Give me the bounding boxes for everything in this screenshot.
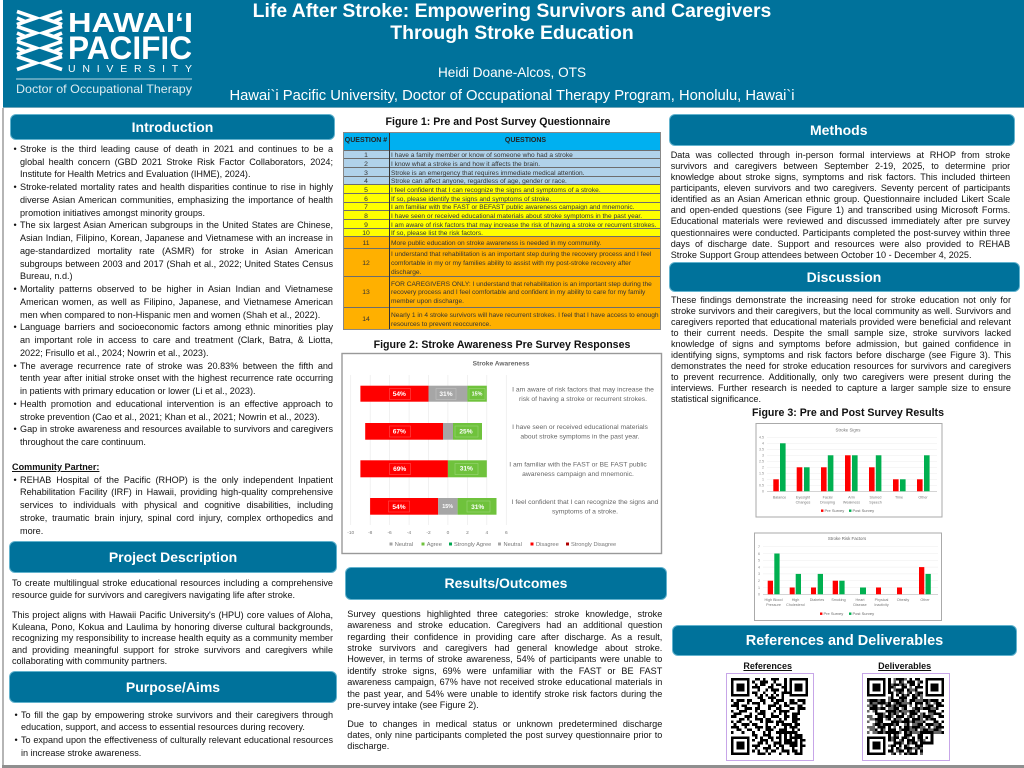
table: survey questionnaire: I know what a stroke is and how it affects the brain. (391, 161, 540, 168)
table: survey questionnaire: 6 (364, 196, 368, 202)
pre survey bars (773, 455, 923, 491)
table: survey questionnaire: I am familiar with the FAST or BEFAST public awareness campaign and mnemonic. (391, 204, 634, 211)
chart: stroke signs: 2 (762, 466, 764, 470)
text block: Project Description goal: resource guide for survivors and caregivers navigating life after stroke. (12, 590, 295, 600)
bar: FAST campaign: 69% (393, 466, 406, 473)
text block: Introduction bullets: tenth year after initial stroke onset with the highest recurrence rate occurring (20, 373, 333, 383)
text block: Introduction bullets: Asian Indian, Filipino, Korean, Japanese and Vietnamese with an increase in (20, 233, 333, 243)
chart: stroke signs: 0.5 (759, 484, 764, 488)
table header: QUESTIONS (505, 137, 546, 144)
panel: Results/Outcomes heading: Results/Outcomes (445, 575, 567, 591)
table: survey questionnaire: I understand that rehabilitation is an important step during the recovery process and I feel (391, 251, 651, 258)
legend: Strongly Disagree (571, 542, 616, 548)
table: survey questionnaire: comfortable in my or my families ability to assist with my post-stroke recovery after (391, 260, 631, 267)
panel: Results/Outcomes heading (345, 567, 667, 600)
QR code: References (726, 673, 814, 761)
chart: stroke signs: Speech (869, 500, 882, 504)
heading: Figure 2: Figure 2: Stroke Awareness Pre Survey Responses (374, 339, 630, 351)
text block: Methods: Educational materials were reviewed and discussed immediately after pre survey (671, 216, 1010, 226)
text block: Purpose/Aims bullets: To expand upon the effectiveness of culturally relevant educational resources (21, 735, 333, 745)
chart: stroke signs: Eyesight (796, 496, 810, 500)
text block: Community Partner: Rehabilitation Facility (IRF) in Hawaii, providing high-quality comprehensive (20, 487, 333, 497)
text block: Project Description goal (12, 578, 333, 600)
chart: stroke signs: 4.5 (759, 436, 764, 440)
text block: Results summary: Survey questions highlighted three categories: stroke knowledge, stroke (347, 609, 662, 619)
table: survey questionnaire: 9 (364, 222, 368, 228)
chart: stroke risk factors: 4 (758, 565, 760, 569)
text block: Results summary: identify stroke signs, 69% were unfamiliar with the FAST or BE FAST (347, 666, 662, 676)
chart: stroke signs: 2.5 (759, 460, 764, 464)
table: survey questionnaire: I have a family member or know of someone who had a stroke (391, 152, 573, 159)
text block: Introduction bullets: promotion initiatives amongst minority groups. (20, 208, 205, 218)
panel: Purpose/Aims heading: Purpose/Aims (126, 679, 220, 695)
chart: stroke risk factors: 3 (758, 572, 760, 576)
text block: Results summary: regarding their confidence in providing care after discharge. As a result, (347, 632, 662, 642)
label: References: References (743, 661, 792, 671)
title (253, 0, 771, 44)
text block: Methods: survivors and caregivers between September 2-19, 2025, to determine prior (671, 161, 1010, 171)
chart: stroke signs: Other (918, 496, 928, 500)
QR code: Deliverables (862, 673, 950, 761)
text block: Results summary (347, 609, 662, 710)
chart: stroke risk factors: 5 (758, 559, 760, 563)
bar: FAST campaign (360, 460, 487, 477)
statement labels (509, 387, 659, 515)
chart: stroke signs: Changes (796, 500, 811, 504)
bar: FAST campaign: 31% (460, 466, 473, 473)
text block: Results discharge note: discharge. (347, 741, 389, 751)
author: Heidi Doane-Alcos, OTS (438, 65, 586, 80)
text block: Purpose/Aims bullets: To fill the gap by empowering stroke survivors and their caregivers through (21, 710, 333, 720)
text block: Project Description goal: To create multilingual stroke educational resources including a comprehensive (12, 578, 333, 588)
chart: stroke signs: Weakness (843, 500, 860, 504)
text block: Methods: and open-ended questions (see Figure 1) and transcribed using Microsoft Forms. (671, 205, 1010, 215)
table: survey questionnaire: I have seen or received educational materials about stroke symptoms in the past year. (391, 213, 642, 220)
text block: Methods: days of discharge date. Support and resources were also provided to REHAB (671, 239, 1010, 249)
chart: stroke risk factors: Stroke Risk Factors (828, 536, 867, 541)
table: survey questionnaire: resources to prevent reoccurence. (391, 321, 491, 328)
text block: Discussion: interviews. Further research is needed to capture a larger sample size to ensure (671, 383, 1011, 393)
legend: Pre Survey (824, 611, 843, 616)
table: survey questionnaire: member upon discharge. (391, 298, 464, 305)
text block: Methods (671, 150, 1010, 260)
panel: Introduction heading: Introduction (132, 119, 213, 135)
table: survey questionnaire: Stroke is an emergency that requires immediate medical attention. (391, 170, 585, 176)
text block: Methods: questionnaires were conducted. Participants completed the post-survey within three (671, 228, 1010, 238)
heading: Figure 1: Figure 1: Pre and Post Survey Questionnaire (386, 116, 610, 128)
text block: Project Description values (12, 610, 333, 666)
chart: stroke signs: 4 (762, 442, 764, 446)
chart: stroke risk factors: 6 (758, 552, 760, 556)
logo: Hawai'i Pacific University (16, 7, 193, 96)
header banner (3, 0, 1024, 108)
legend: Pre Survey (824, 508, 844, 513)
text block: Methods: participants, eleven survivors and two caregivers. Seventy percent of participants (671, 183, 1010, 193)
chart: stroke risk factors: Disease (853, 603, 867, 607)
text block: Discussion: statistical significance. (671, 394, 761, 404)
bar: confidence recognizing signs: 31% (471, 504, 484, 511)
chart: stroke risk factors: Pressure (766, 603, 781, 607)
x axis labels: -8 (368, 530, 373, 536)
table: survey questionnaire: 13 (362, 289, 370, 296)
chart: stroke signs: Stroke Signs (836, 428, 861, 432)
legend (390, 542, 616, 548)
panel: References and Deliverables heading (672, 625, 1017, 656)
bar: confidence recognizing signs: 15% (442, 504, 453, 510)
text block: Introduction bullets: Stroke is the third leading cause of death in 2021 and continues to be a (20, 144, 333, 154)
legend: Disagree (536, 542, 559, 548)
text block: Introduction bullets: The average recurrence rate of stroke was 20.83% between the fifth and (20, 361, 333, 371)
statement labels: I feel confident that I can recognize the signs and (512, 499, 659, 506)
table: survey questionnaire: 1 (364, 152, 368, 159)
chart: stroke signs: 3.5 (759, 448, 764, 452)
text block: Introduction bullets: Language barriers and socioeconomic factors among ethnic minorities play (20, 322, 333, 332)
chart: stroke signs: 1 (762, 478, 764, 482)
legend: Neutral (504, 542, 522, 548)
text block: Methods: Stroke Support Group attendees between October 10 - December 4, 2025. (671, 250, 971, 260)
text block: Project Description values: and providing meaningful support for stroke survivors and caregivers while (12, 645, 333, 655)
text block: Introduction bullets: American women, as well as Filipino, Japanese, and Vietnamese American (20, 297, 333, 307)
heading: Community Partner: Community Partner: (12, 462, 99, 472)
panel: Methods heading (668, 114, 1015, 146)
logo wordmark: PACIFIC (68, 30, 192, 66)
chart: stroke risk factors: High Blood (764, 598, 783, 602)
title: Life After Stroke: Empowering Survivors and Caregivers (253, 0, 771, 22)
chart: stroke risk factors: Other (920, 598, 930, 602)
text block: Methods: Data was collected through in-person formal interviews at RHOP from stroke (671, 150, 1010, 160)
statement labels: symptoms of a stroke. (552, 508, 618, 515)
panel: Discussion heading: Discussion (807, 269, 881, 285)
chart: stroke risk factors: High (792, 598, 799, 602)
text block: Project Description values: recognizing my responsibility to increase health equity as a community member (12, 633, 333, 643)
legend: Post Survey (852, 611, 874, 616)
text block: Project Description values: collaborating with community partners. (12, 656, 167, 666)
statement labels: I have seen or received educational materials (512, 424, 649, 431)
chart: stroke risk factors: Heart (855, 598, 865, 602)
chart: stroke risk factors (754, 532, 942, 621)
legend (821, 508, 874, 513)
chart: stroke signs: Time (895, 496, 903, 500)
text block: Introduction bullets: age-standardized mortality rate (ASMR) for stroke in Asian American (20, 246, 333, 256)
x axis labels: 2 (466, 530, 469, 536)
text block: Discussion: demonstrates the need for stroke education resources for survivors and caregivers (671, 361, 1011, 371)
legend: Post Survey (852, 508, 874, 513)
panel: Project Description heading (9, 541, 337, 573)
chart: stroke signs: 0 (762, 490, 764, 494)
text block: Introduction bullets: Institute for Health Metrics and Evaluation (IHME), 2024). (20, 169, 250, 179)
statement labels: I am familiar with the FAST or BE FAST public (509, 462, 647, 469)
table: survey questionnaire: If so, please identify the signs and symptoms of stroke. (391, 196, 551, 202)
bar: educational materials (365, 423, 482, 440)
table: survey questionnaire: 8 (364, 213, 368, 220)
chart: stroke signs: 1.5 (759, 472, 764, 476)
bar: risk factors: 15% (472, 392, 483, 398)
logo wordmark: HAWAI‘I (68, 7, 193, 38)
chart: stroke risk factors: Smoking (831, 598, 846, 602)
x axis labels: -2 (426, 530, 431, 536)
text block: Results summary: stroke survivors and caregivers had general knowledge about stroke. (347, 643, 662, 653)
logo wordmark: UNIVERSITY (68, 63, 192, 75)
text block: Purpose/Aims bullets: in increase stroke awareness. (21, 748, 141, 758)
table: survey questionnaire: More public education on stroke awareness is needed in my community. (391, 240, 601, 247)
chart: stroke risk factors: Obesity (897, 598, 909, 602)
table: survey questionnaire: 12 (362, 260, 370, 267)
text block: Introduction bullets: Mortality patterns observed to be higher in Asian Indian and Vietnamese (20, 284, 333, 294)
text block: Results summary: awareness and stroke education. Caregivers had an additional question (347, 620, 662, 630)
text block: Results summary: awareness campaign, 67% have not received stroke educational materials in (347, 677, 662, 687)
logo wordmark (16, 7, 193, 96)
text block: Introduction bullets: in patients with primary education or lower (Li et al., 2023). (20, 386, 256, 396)
text block: Community Partner (14, 475, 333, 536)
text block: Introduction bullets: 2022; Frisullo et al., 2024; Nowrin et al., 2023). (20, 348, 209, 358)
text block: Results discharge note: Due to changes in medical status or unknown predetermined discharge (347, 719, 662, 729)
table: survey questionnaire: 4 (364, 178, 368, 185)
logo wordmark: Doctor of Occupational Therapy (16, 83, 192, 96)
icon: chevron pattern (17, 12, 62, 70)
panel: Introduction heading (10, 114, 335, 140)
table: survey questionnaire: I feel confident that I can recognize the signs and symptoms of a stroke. (391, 187, 601, 194)
label: Deliverables: Deliverables (878, 661, 931, 671)
text block: Introduction bullets: The six largest Asian American subgroups in the United States are Chinese, (20, 220, 333, 230)
bar: risk factors: 31% (439, 391, 453, 398)
chart: stroke risk factors: 0 (758, 593, 760, 597)
post survey bars (780, 443, 930, 491)
text block: Purpose/Aims bullets: education, support, and access to essential resources during recovery. (21, 722, 305, 732)
legend: Agree (427, 542, 442, 548)
table header: QUESTION # (345, 137, 387, 144)
chart: stroke risk factors: Physical (875, 598, 889, 602)
text block: Discussion: knowledge of signs and symptoms before admission, but gained confidence in (671, 339, 1011, 349)
text block: Discussion: to prevent recurrence. Additionally, only two caregivers were present during the (671, 372, 1011, 382)
x axis labels: 4 (485, 530, 488, 536)
text block: Project Description values: This project aligns with Hawaii Pacific University's (HPU) core values of Aloha, (12, 610, 333, 620)
statement labels: about stroke symptoms in the past year. (520, 433, 640, 440)
text block: Introduction bullets: Health promotion and educational intervention is an effective approach to (20, 399, 333, 409)
chart: stroke signs: Facial (823, 496, 833, 500)
chart: stroke signs: Arm (848, 496, 855, 500)
text block: Introduction bullets: men when compared to non-Hispanic men and women (Shah et al., 2022). (20, 310, 320, 320)
text block: Results discharge note: dates, only nine participants completed the post survey questionnaire prior to (347, 730, 662, 740)
table: survey questionnaire: FOR CAREGIVERS ONLY: I understand that rehabilitation is an important step during the (391, 281, 652, 288)
text block: Introduction bullets: Bureau, n.d.) (20, 271, 73, 281)
x axis labels: -10 (347, 530, 354, 536)
chart: stroke risk factors: Inactivity (874, 603, 889, 607)
chart: stroke risk factors: 7 (758, 545, 760, 549)
text block: Purpose/Aims bullets (14, 710, 333, 758)
text block: Community Partner: REHAB Hospital of the Pacific (RHOP) is the only independent Inpatient (20, 475, 333, 485)
pre survey bars (768, 567, 924, 594)
panel: References and Deliverables heading: References and Deliverables (746, 632, 943, 648)
x axis labels: 0 (447, 530, 450, 536)
x axis labels: 6 (505, 530, 508, 536)
text block: Introduction bullets: global health concern (GBD 2021 Stroke Risk Factor Collaborators, 2024; (20, 157, 333, 167)
text block: Discussion: to their current needs. Despite the small sample size, stroke survivors lacked (671, 328, 1011, 338)
text block: Discussion: These findings demonstrate the increasing need for stroke education not only for (671, 294, 1011, 304)
text block: Introduction bullets: Stroke-related mortality rates and health disparities continue to rise in highly (20, 182, 333, 192)
text block: Methods: identified as an Asian American ethnic group. Questionnaire included Likert Scale (671, 194, 1010, 204)
table: survey questionnaire: I am aware of risk factors that may increase the risk of having a stroke or recurrent strokes. (391, 222, 656, 228)
statement labels: risk of having a stroke or recurrent strokes. (519, 396, 647, 403)
text block: Discussion: stroke survivors and their caregivers, but the local community as well. Survivors and (671, 306, 1011, 316)
text block: Project Description values: Kuleana, Pono, Kokua and Laulima by honoring diverse cultural backgrounds, (12, 622, 333, 632)
text block: Results discharge note (347, 719, 662, 751)
table header (343, 132, 661, 151)
text block: Discussion: identifying signs, symptoms and risk factors before discharge (see Figure 3). This (671, 350, 1011, 360)
text block: Introduction bullets: subgroups between 2003 and 2017 (Shah et al., 2022; United States Census (20, 259, 333, 269)
text block: Introduction bullets: diverse Asian American communities, emphasizing the importance of health (20, 195, 333, 205)
x axis labels (347, 530, 508, 536)
text block: Introduction bullets: stroke prevention (Cao et al., 2021; Khan et al., 2021; Nowrin et al., 2023). (20, 412, 320, 422)
table: survey questionnaire: Stroke can affect anyone, regardless of age, gender or race. (391, 178, 567, 185)
panel: Discussion heading (669, 262, 1020, 292)
table: survey questionnaire: 2 (364, 161, 368, 168)
table: survey questionnaire: recovery process and I feel comfortable and confident in my ability to care for my family (391, 289, 645, 296)
statement labels: I am aware of risk factors that may increase the (512, 387, 654, 394)
x axis labels: -6 (387, 530, 392, 536)
table: survey questionnaire: 5 (364, 187, 368, 194)
bar: confidence recognizing signs (370, 498, 496, 515)
heading: Figure 3: Figure 3: Pre and Post Survey Results (752, 406, 944, 418)
bar: risk factors: 54% (393, 391, 406, 398)
panel: Methods heading: Methods (810, 122, 868, 138)
chart: stroke risk factors: 2 (758, 579, 760, 583)
table: survey questionnaire: Nearly 1 in 4 stroke survivors will have recurrent strokes. I feel that I have access to enough (391, 312, 659, 319)
text block: Community Partner: services to individuals with physical and cognitive disabilities, including (20, 500, 333, 510)
text block: Discussion: caregivers reported that educational materials provided were beneficial and relevant (671, 317, 1011, 327)
panel: Purpose/Aims heading (9, 671, 337, 703)
chart: stroke risk factors: 1 (758, 586, 760, 590)
text block: Introduction bullets: throughout the care continuum. (20, 437, 146, 447)
table: survey questionnaire: 10 (362, 230, 370, 237)
x axis labels: -4 (407, 530, 412, 536)
chart: stroke signs (756, 423, 942, 518)
legend: Strongly Agree (454, 542, 491, 548)
text block: Results summary: However, in terms of stroke awareness, 54% of participants were unable to (347, 654, 662, 664)
table: survey questionnaire (343, 132, 661, 330)
text block: Results summary: pre-survey intake (see Figure 2). (347, 700, 479, 710)
bar: risk factors (360, 386, 487, 402)
affiliation: Hawai`i Pacific University, Doctor of Occupational Therapy Program, Honolulu, Hawai`i (229, 88, 795, 104)
chart: stroke signs: Drooping (820, 500, 835, 504)
bar: confidence recognizing signs: 54% (392, 504, 406, 511)
table: survey questionnaire: 7 (364, 204, 368, 211)
text block: Methods: knowledge about stroke signs, symptoms and risk factors. This included thirteen (671, 172, 1010, 182)
chart: stroke signs: Slurred (870, 496, 881, 500)
text block: Community Partner: stroke, traumatic brain injury, spinal cord injury, complex orthopedics and (20, 513, 333, 523)
table: survey questionnaire: discharge. (391, 269, 421, 276)
table: survey questionnaire: 11 (362, 240, 370, 247)
chart: stroke signs: Balance (773, 496, 786, 500)
chart: stroke awareness stacked bars: Stroke Awareness (473, 361, 530, 368)
legend (820, 611, 874, 616)
table: survey questionnaire: 3 (364, 170, 368, 176)
bar: educational materials: 67% (393, 429, 406, 436)
chart: stroke risk factors: Diabetes (810, 598, 824, 602)
text block: Community Partner: more. (20, 526, 43, 536)
chart: stroke signs: 3 (762, 454, 764, 458)
legend: Neutral (395, 542, 413, 548)
text block: Discussion (671, 294, 1011, 404)
post survey bars (774, 554, 931, 594)
bar: educational materials: 25% (459, 429, 473, 436)
table: survey questionnaire: If so, please list the risk factors. (391, 230, 483, 237)
table: survey questionnaire: 14 (362, 316, 370, 323)
text block: Introduction bullets (14, 144, 334, 447)
statement labels: awareness campaign and mnemonic. (522, 471, 634, 478)
title: Through Stroke Education (390, 22, 634, 44)
text block: Introduction bullets: an important role in access to care and treatment (Clark, Batra, & Liotta, (20, 335, 333, 345)
chart: stroke risk factors: Cholesterol (786, 603, 805, 607)
text block: Results summary: the past year, and 54% were unable to identify stroke risk factors during the (347, 689, 662, 699)
panel: Project Description heading: Project Description (109, 549, 237, 565)
text block: Introduction bullets: Gap in stroke awareness and resources available to survivors and caregivers (20, 424, 333, 434)
